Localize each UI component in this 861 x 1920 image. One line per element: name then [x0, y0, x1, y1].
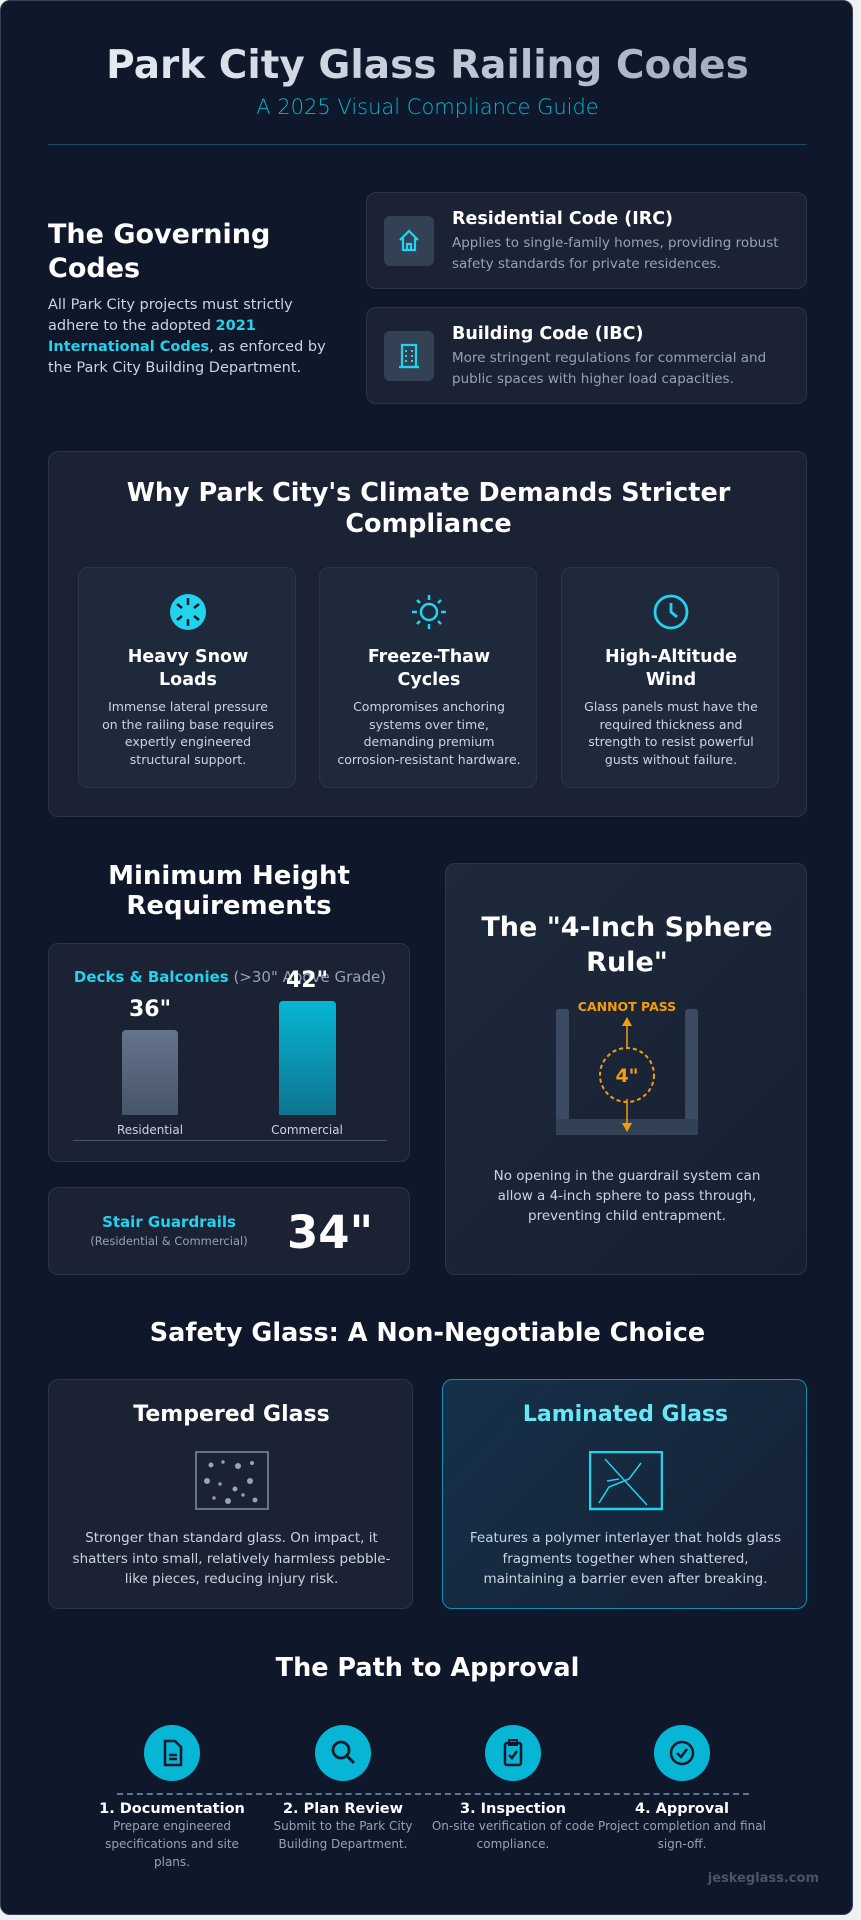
icon: snow: [170, 594, 206, 630]
card: laminated: Laminated Glass: [523, 1402, 728, 1427]
card: IRC: Residential Code (IRC): [452, 209, 673, 229]
card: IBC: More stringent regulations for commercial and public spaces with higher load capacities.: [452, 350, 766, 387]
bar: residential: [122, 1030, 178, 1115]
card: snow: Immense lateral pressure on the railing base requires expertly engineered structural support.: [102, 699, 274, 766]
card: snow: Heavy Snow: [128, 647, 248, 667]
icon: check: [654, 1725, 710, 1781]
step 1: 1. Documentation: [99, 1801, 245, 1817]
text: sphere: No opening in the guardrail system can allow a 4-inch sphere to pass through, preventing child entrapment.: [494, 1168, 760, 1224]
icon: building: [384, 331, 434, 381]
heading: governing codes: The Governing Codes: [48, 219, 270, 284]
heading: climate: Compliance: [345, 509, 512, 539]
step 1: Prepare engineered specifications and site plans.: [105, 1819, 239, 1869]
card: IBC: Building Code (IBC): [452, 324, 643, 344]
diagram: sphere: 4": [615, 1065, 639, 1087]
card: snow: Loads: [159, 670, 217, 690]
card: tempered: Stronger than standard glass. On impact, it shatters into small, relatively harmless pebble-like pieces, reducing injury risk.: [73, 1530, 390, 1587]
card: laminated: [442, 1379, 807, 1609]
icon: house: [384, 216, 434, 266]
label: decks: Decks & Balconies (>30" Above Grade): [74, 968, 386, 986]
card: freeze-thaw: Compromises anchoring systems over time, demanding premium corrosion-resistant hardware.: [337, 699, 521, 766]
panel: stair guardrails: (Residential & Commercial): [90, 1234, 248, 1248]
diagram: sphere: [556, 999, 698, 1135]
icon: laminated: [589, 1451, 663, 1510]
heading: sphere: Rule": [586, 947, 668, 978]
step 1: [99, 1725, 245, 1869]
card: freeze-thaw: [319, 567, 537, 788]
panel: stair guardrails: Stair Guardrails: [102, 1213, 236, 1231]
card: snow: [78, 567, 296, 788]
step 3: 3. Inspection: [460, 1801, 566, 1817]
step 2: [273, 1725, 413, 1851]
panel: decks chart: 42": [286, 968, 328, 993]
panel: stair guardrails: [48, 1187, 410, 1275]
icon: sun: [412, 595, 446, 629]
diagram: sphere: CANNOT PASS: [578, 999, 676, 1014]
card: tempered: Tempered Glass: [133, 1402, 330, 1427]
card: IBC: [366, 307, 807, 404]
panel: climate: [48, 451, 807, 817]
card: IRC: [366, 192, 807, 289]
footer: jeskeglass.com: [708, 1871, 819, 1886]
icon: search: [315, 1725, 371, 1781]
heading: sphere: The "4-Inch Sphere: [481, 912, 773, 943]
text: governing codes: All Park City projects must strictly adhere to the adopted 2021 International Codes, as enforced by the Park City Building Department.: [48, 297, 326, 376]
icon: clock: [654, 594, 688, 630]
step 3: On-site verification of code compliance.: [432, 1819, 594, 1851]
step 4: 4. Approval: [635, 1801, 729, 1817]
card: wind: High-Altitude: [605, 647, 737, 667]
card: wind: [561, 567, 779, 788]
heading: sphere: [481, 912, 773, 978]
subtitle: A 2025 Visual Compliance Guide: [256, 95, 599, 119]
step 2: 2. Plan Review: [283, 1801, 403, 1817]
step 4: [598, 1725, 766, 1851]
step 2: Submit to the Park City Building Department.: [273, 1819, 413, 1851]
heading: minimum height: Requirements: [126, 891, 332, 921]
bar: commercial: [279, 1001, 336, 1115]
card: freeze-thaw: Freeze-Thaw: [368, 647, 490, 667]
card: freeze-thaw: Cycles: [398, 670, 460, 690]
heading: minimum height: [108, 861, 350, 921]
card: wind: Glass panels must have the required thickness and strength to resist powerful gusts without failure.: [584, 699, 758, 766]
card: wind: Wind: [646, 670, 696, 690]
panel: decks chart: [48, 943, 410, 1162]
heading: safety glass: Safety Glass: A Non-Negotiable Choice: [150, 1318, 705, 1348]
card: IRC: Applies to single-family homes, providing robust safety standards for private residences.: [452, 235, 779, 272]
panel: sphere rule: [445, 863, 807, 1275]
step 4: Project completion and final sign-off.: [598, 1819, 766, 1851]
icon: document: [144, 1725, 200, 1781]
panel: decks chart: Commercial: [271, 1123, 343, 1137]
heading: path to approval: The Path to Approval: [276, 1653, 579, 1683]
icon: tempered: [195, 1451, 269, 1510]
value: 34: 34": [287, 1206, 373, 1259]
step 3: [432, 1725, 594, 1851]
heading: climate: [127, 478, 730, 539]
title: Park City Glass Railing Codes: [106, 43, 749, 88]
card: tempered: [48, 1379, 413, 1609]
heading: climate: Why Park City's Climate Demands Stricter: [127, 478, 730, 508]
icon: clipboard: [485, 1725, 541, 1781]
card: laminated: Features a polymer interlayer that holds glass fragments together when shattered, maintaining a barrier even after breaking.: [470, 1530, 781, 1587]
panel: decks chart: 36": [129, 997, 171, 1022]
panel: decks chart: Residential: [117, 1123, 183, 1137]
heading: minimum height: Minimum Height: [108, 861, 350, 891]
